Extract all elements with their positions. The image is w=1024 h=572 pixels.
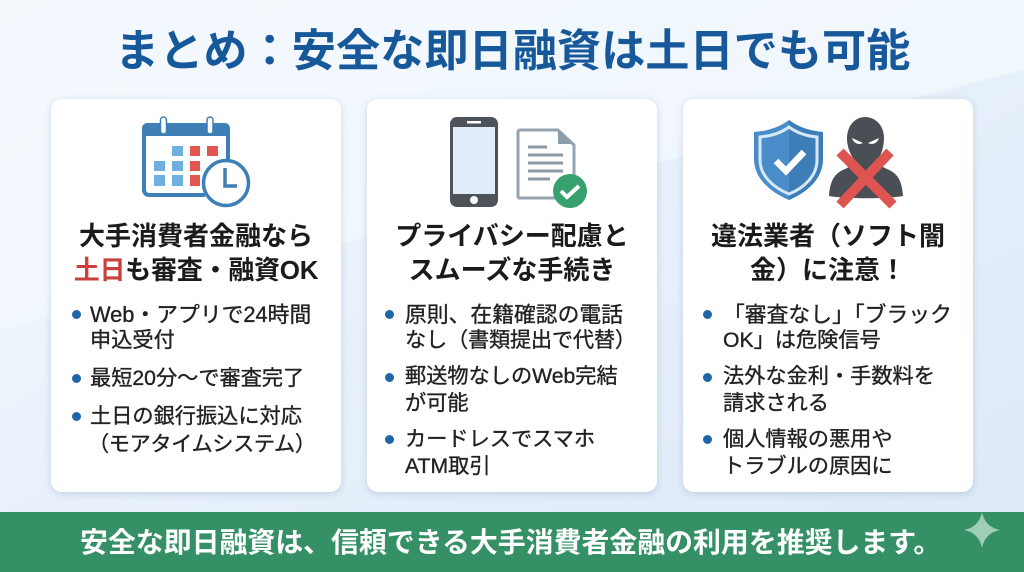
heading line 2: 金）に注意！ <box>750 255 906 285</box>
bullet list <box>72 302 316 456</box>
bullet 1 <box>385 302 636 352</box>
bullet 3: 土日の銀行振込に対応 <box>90 405 302 428</box>
bullet 3: ATM取引 <box>405 455 491 478</box>
bullet 1: 申込受付 <box>90 329 175 352</box>
bullet 3: トラブルの原因に <box>723 455 893 478</box>
title: まとめ：安全な即日融資は土日でも可能 <box>115 27 910 76</box>
heading: 違法業者（ソフト闇 <box>711 221 945 251</box>
bullet 2: 請求される <box>723 392 829 415</box>
bullet 2 <box>703 364 935 415</box>
icon: phone and document <box>450 117 587 208</box>
heading: プライバシー配慮と <box>395 221 629 251</box>
bullet 3 <box>703 428 893 478</box>
bullet 2 <box>385 364 618 415</box>
heading line 2: 土日も審査・融資OK <box>74 255 318 285</box>
icon: shield and masked criminal <box>754 117 903 208</box>
bullet 3: 個人情報の悪用や <box>723 428 893 451</box>
bullet list <box>703 302 952 478</box>
bullet 3 <box>385 428 595 478</box>
bullet 1: 原則、在籍確認の電話 <box>405 302 623 327</box>
bullet 2: 郵送物なしのWeb完結 <box>405 365 618 388</box>
bullet 2: が可能 <box>405 392 469 415</box>
icon: sparkle <box>964 512 1000 548</box>
bullet 2: 最短20分〜で審査完了 <box>90 367 304 390</box>
bullet 3 <box>72 404 316 456</box>
bullet 1: 「審査なし」「ブラック <box>723 302 952 327</box>
heading: 大手消費者金融なら <box>79 221 313 251</box>
footer text: 安全な即日融資は、信頼できる大手消費者金融の利用を推奨します。 <box>80 527 941 558</box>
icon: calendar and clock <box>142 116 250 208</box>
bullet list <box>385 302 636 478</box>
bullet 1 <box>703 302 952 352</box>
footer banner <box>0 512 1024 572</box>
panel: weekend <box>51 99 341 492</box>
bullet 3: （モアタイムシステム） <box>88 433 316 456</box>
bullet 1: Web・アプリで24時間 <box>90 302 311 327</box>
bullet 1: OK」は危険信号 <box>723 329 881 352</box>
panel: privacy <box>367 99 657 492</box>
bullet 1: なし（書類提出で代替） <box>405 329 636 352</box>
panel: warning <box>683 99 973 492</box>
bullet 2: 法外な金利・手数料を <box>723 365 935 388</box>
heading line 2: スムーズな手続き <box>409 255 615 285</box>
bullet 3: カードレスでスマホ <box>405 428 595 451</box>
bullet 1 <box>72 302 311 352</box>
